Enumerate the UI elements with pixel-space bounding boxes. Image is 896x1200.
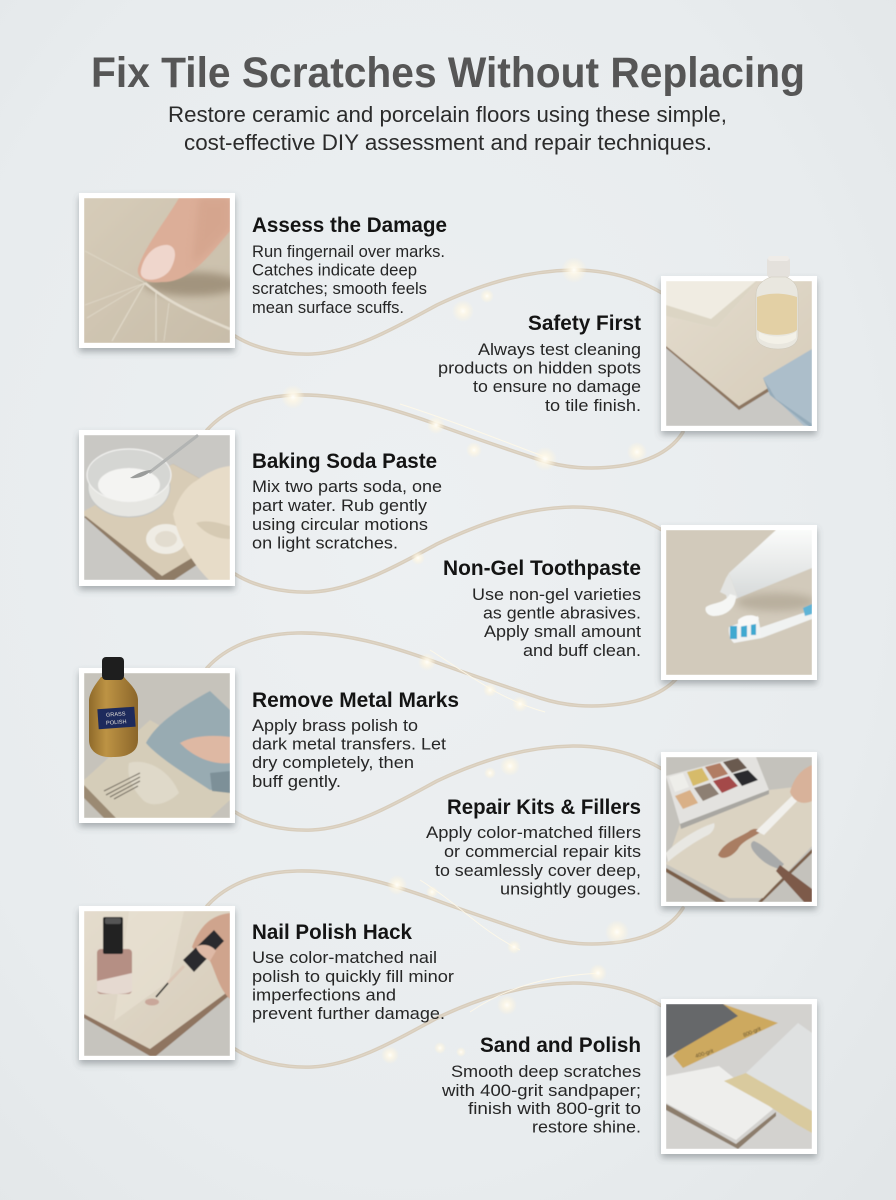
body text: Run fingernail over marks. [252, 242, 445, 261]
connector: assess to safety [235, 257, 662, 354]
body text [438, 340, 641, 415]
body text: to ensure no damage [473, 377, 641, 396]
connector: toothpaste to metal marks [207, 633, 683, 712]
connector: nail polish to sand and polish [235, 964, 662, 1067]
body text: restore shine. [532, 1118, 641, 1136]
body text: mean surface scuffs. [252, 298, 404, 317]
body text: polish to quickly fill minor [252, 967, 454, 986]
photo card: finger on scratched tile [79, 193, 240, 348]
body text [472, 585, 641, 660]
step: safety first [438, 256, 817, 431]
photo card: toothpaste tube and toothbrush [661, 525, 817, 680]
heading: Assess the Damage [252, 214, 447, 237]
title: Fix Tile Scratches Without Replacing [91, 49, 805, 97]
body text: or commercial repair kits [444, 842, 641, 861]
step: remove metal marks [79, 657, 459, 823]
body text [426, 823, 641, 898]
icon: oil bottle [756, 256, 798, 349]
connector: metal marks to repair kits [235, 746, 662, 830]
body text: scratches; smooth feels [252, 279, 427, 298]
body text [252, 948, 454, 1023]
body text: and buff clean. [523, 641, 641, 660]
heading: Nail Polish Hack [252, 921, 412, 944]
body text: Mix two parts soda, one [252, 477, 442, 496]
heading: Baking Soda Paste [252, 450, 437, 473]
connector: repair kits to nail polish [207, 871, 683, 954]
body text: to tile finish. [545, 396, 641, 415]
body text: using circular motions [252, 515, 428, 534]
body text: on light scratches. [252, 534, 398, 552]
subtitle: cost-effective DIY assessment and repair techniques. [184, 130, 712, 155]
body text [441, 1062, 641, 1136]
body text: Always test cleaning [478, 340, 641, 359]
step: repair kits and fillers [426, 752, 817, 906]
heading: Non-Gel Toothpaste [443, 557, 641, 580]
heading: Repair Kits & Fillers [447, 796, 641, 819]
icon: brass polish bottle: POLISH [106, 719, 127, 727]
photo card: colour palette and filler on tile [661, 752, 817, 906]
body text: dry completely, then [252, 753, 414, 772]
photo card: sandpaper, polishing cloth and tiles: 800-grit [743, 1026, 762, 1039]
heading: Remove Metal Marks [252, 689, 459, 712]
body text: Apply brass polish to [252, 716, 418, 735]
step: assess the damage [79, 193, 447, 348]
body text: as gentle abrasives. [483, 604, 641, 622]
body text: Smooth deep scratches [451, 1062, 641, 1081]
body text: Use non-gel varieties [472, 585, 641, 604]
body text: dark metal transfers. Let [252, 734, 446, 754]
photo card: sandpaper, polishing cloth and tiles [661, 999, 817, 1154]
body text [252, 242, 445, 317]
body text [252, 477, 442, 552]
step: non-gel toothpaste [443, 525, 817, 680]
body text: with 400-grit sandpaper; [441, 1081, 641, 1100]
icon: brass polish bottle [89, 657, 138, 757]
icon: spoon [130, 436, 197, 478]
body text: to seamlessly cover deep, [435, 861, 641, 880]
body text: finish with 800-grit to [468, 1099, 641, 1118]
body text: buff gently. [252, 772, 341, 791]
body text: Apply color-matched fillers [426, 823, 641, 842]
body text [252, 716, 446, 791]
step: sand and polish [441, 999, 817, 1154]
connector: baking soda to toothpaste [235, 507, 662, 592]
step: nail polish hack [79, 906, 454, 1060]
body text: Catches indicate deep [252, 260, 417, 280]
photo card: bowl of baking soda and cloth on tile [79, 430, 235, 586]
photo card: brass polish and cloth on tile [79, 657, 235, 823]
body text: prevent further damage. [252, 1004, 445, 1023]
connector: safety to baking soda [207, 385, 683, 471]
body text: Apply small amount [484, 622, 641, 641]
photo card: nail polish and brush on tile [79, 906, 235, 1060]
step: baking soda paste [79, 430, 442, 586]
heading: Sand and Polish [480, 1034, 641, 1057]
body text: unsightly gouges. [500, 880, 641, 898]
body text: products on hidden spots [438, 358, 641, 378]
body text: Use color-matched nail [252, 948, 437, 967]
heading: Safety First [528, 312, 641, 335]
body text: part water. Rub gently [252, 496, 428, 515]
subtitle: Restore ceramic and porcelain floors using these simple, [168, 102, 727, 127]
icon: brass polish bottle: GRASS [106, 711, 126, 719]
body text: imperfections and [252, 986, 396, 1004]
subtitle [168, 102, 727, 155]
photo card: sandpaper, polishing cloth and tiles: 400-grit [695, 1048, 715, 1060]
photo card: towel, bottle and cloth on tile [661, 256, 817, 431]
